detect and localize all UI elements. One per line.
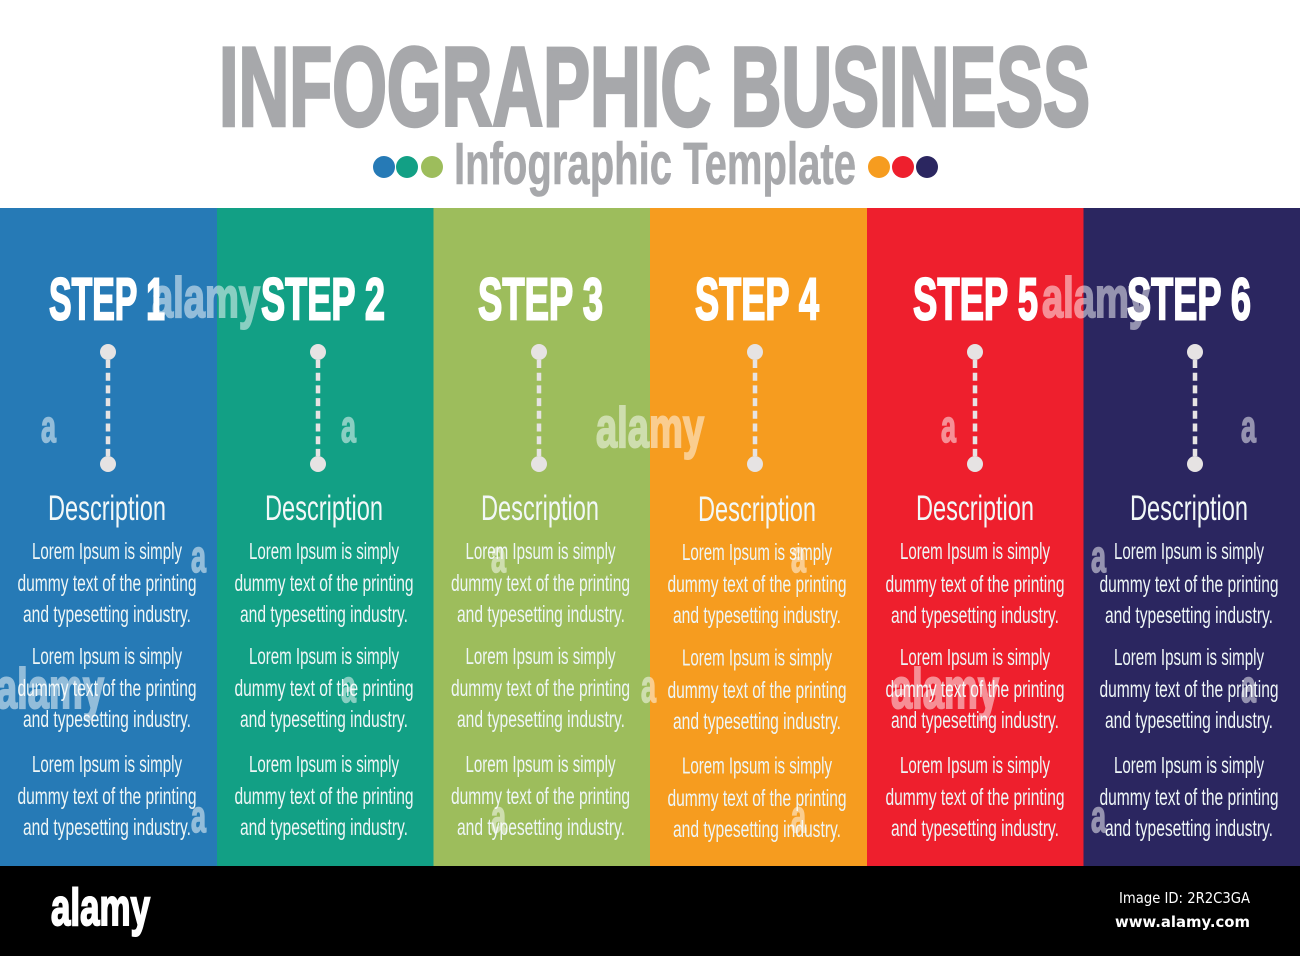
step 2 body text: and typesetting industry. [240,706,408,732]
watermark overlays: a [1241,401,1257,452]
right colour dots [868,156,938,178]
watermark overlays: a [1091,791,1107,842]
step 3 body text: Lorem Ipsum is simply [466,538,616,564]
watermark overlays: a [941,401,957,452]
panel: step 5 [867,208,1084,866]
step 2 body text [234,538,414,840]
step 5 body text: Lorem Ipsum is simply [900,644,1050,670]
panel: step 2 [217,208,434,866]
step 4 description heading: Description [698,490,816,529]
footer bar [0,866,1300,956]
watermark overlays: a [491,791,507,842]
step 5 body text [886,538,1064,841]
step 3 heading: STEP 3 [478,266,603,332]
step 2 body text: Lorem Ipsum is simply [249,538,399,564]
step 5 body text: and typesetting industry. [891,707,1059,733]
step 4 body text [668,539,846,842]
step 3 description heading: Description [481,489,599,528]
watermark overlays: a [491,531,507,582]
step 1 body text: and typesetting industry. [23,601,191,627]
watermark overlays: a [641,661,657,712]
step 3 body text [451,538,630,840]
step 4 body text: Lorem Ipsum is simply [682,539,832,565]
website: www.alamy.com [1115,913,1250,931]
watermark overlays: alamy [152,266,260,330]
step 4 body text: dummy text of the printing [668,677,846,703]
step 1 description heading: Description [48,489,166,528]
step 5 heading: STEP 5 [913,266,1038,332]
step 4 body text: dummy text of the printing [668,785,846,811]
step 2 body text: dummy text of the printing [234,783,414,809]
step 3 body text: dummy text of the printing [451,675,630,701]
watermark overlays [0,266,1257,842]
step 3 body text: and typesetting industry. [457,601,625,627]
step 1 body text: Lorem Ipsum is simply [32,538,182,564]
subtitle: Infographic Template [454,131,856,197]
step 3 body text: and typesetting industry. [457,814,625,840]
step 2 body text: dummy text of the printing [234,675,414,701]
step 1 body text: Lorem Ipsum is simply [32,751,182,777]
watermark overlays: a [41,401,57,452]
watermark overlays: alamy [0,657,104,721]
step 2 heading: STEP 2 [261,266,385,332]
left colour dots [373,156,443,178]
step 2 body text: and typesetting industry. [240,601,408,627]
header background [0,0,1300,208]
step 5 body text: and typesetting industry. [891,602,1059,628]
step 3 body text: dummy text of the printing [451,783,630,809]
step 4 body text: and typesetting industry. [673,602,841,628]
image id: Image ID: 2R2C3GA [1119,889,1251,907]
step 3 body text: Lorem Ipsum is simply [466,643,616,669]
watermark overlays: a [1241,661,1257,712]
step 1 body text: and typesetting industry. [23,814,191,840]
watermark overlays: a [791,531,807,582]
panel: step 1 [0,208,217,866]
panel: step 4 [650,208,867,866]
watermark overlays: a [1091,531,1107,582]
step 2 body text: Lorem Ipsum is simply [249,643,399,669]
step 4 body text: and typesetting industry. [673,708,841,734]
step 3 body text: Lorem Ipsum is simply [466,751,616,777]
step 1 body text: dummy text of the printing [18,675,196,701]
step 4 connector [747,344,763,472]
watermark overlays: a [191,531,207,582]
watermark overlays: a [341,401,357,452]
watermark overlays: a [191,791,207,842]
step 1 body text: dummy text of the printing [18,783,196,809]
step 5 body text: dummy text of the printing [886,571,1064,597]
step 6 connector [1187,344,1203,472]
step 3 connector [531,344,547,472]
step 2 body text: dummy text of the printing [234,570,414,596]
step 5 connector [967,344,983,472]
watermark overlays: a [791,791,807,842]
step 3 body text: dummy text of the printing [451,570,630,596]
step 2 body text: and typesetting industry. [240,814,408,840]
panel: step 6 [1084,208,1300,866]
step 1 body text: Lorem Ipsum is simply [32,643,182,669]
step 5 body text: Lorem Ipsum is simply [900,752,1050,778]
watermark overlays: alamy [891,657,999,721]
step 4 body text: Lorem Ipsum is simply [682,752,832,778]
step 1 body text: and typesetting industry. [23,706,191,732]
footer logo: alamy [51,879,150,937]
step 5 body text: dummy text of the printing [886,784,1064,810]
step 2 body text: Lorem Ipsum is simply [249,751,399,777]
step 5 body text: Lorem Ipsum is simply [900,538,1050,564]
subtitle row [373,131,938,197]
step 5 body text: and typesetting industry. [891,815,1059,841]
step 1 connector [100,344,116,472]
step 6 description heading: Description [1130,489,1248,528]
step 4 body text: dummy text of the printing [668,571,846,597]
panel: step 3 [434,208,650,866]
step 2 description heading: Description [265,489,383,528]
step 5 description heading: Description [916,489,1034,528]
step 1 body text [18,538,196,840]
step 1 body text: dummy text of the printing [18,570,196,596]
watermark overlays: alamy [596,396,704,460]
step 4 heading: STEP 4 [695,266,819,332]
step 4 body text: and typesetting industry. [673,816,841,842]
step 5 body text: dummy text of the printing [886,676,1064,702]
step 6 body text [1100,538,1278,841]
watermark overlays: alamy [1042,266,1150,330]
step 2 connector [310,344,326,472]
watermark overlays: a [341,661,357,712]
step 1 heading: STEP 1 [49,266,165,332]
step 4 body text: Lorem Ipsum is simply [682,644,832,670]
step 3 body text: and typesetting industry. [457,706,625,732]
